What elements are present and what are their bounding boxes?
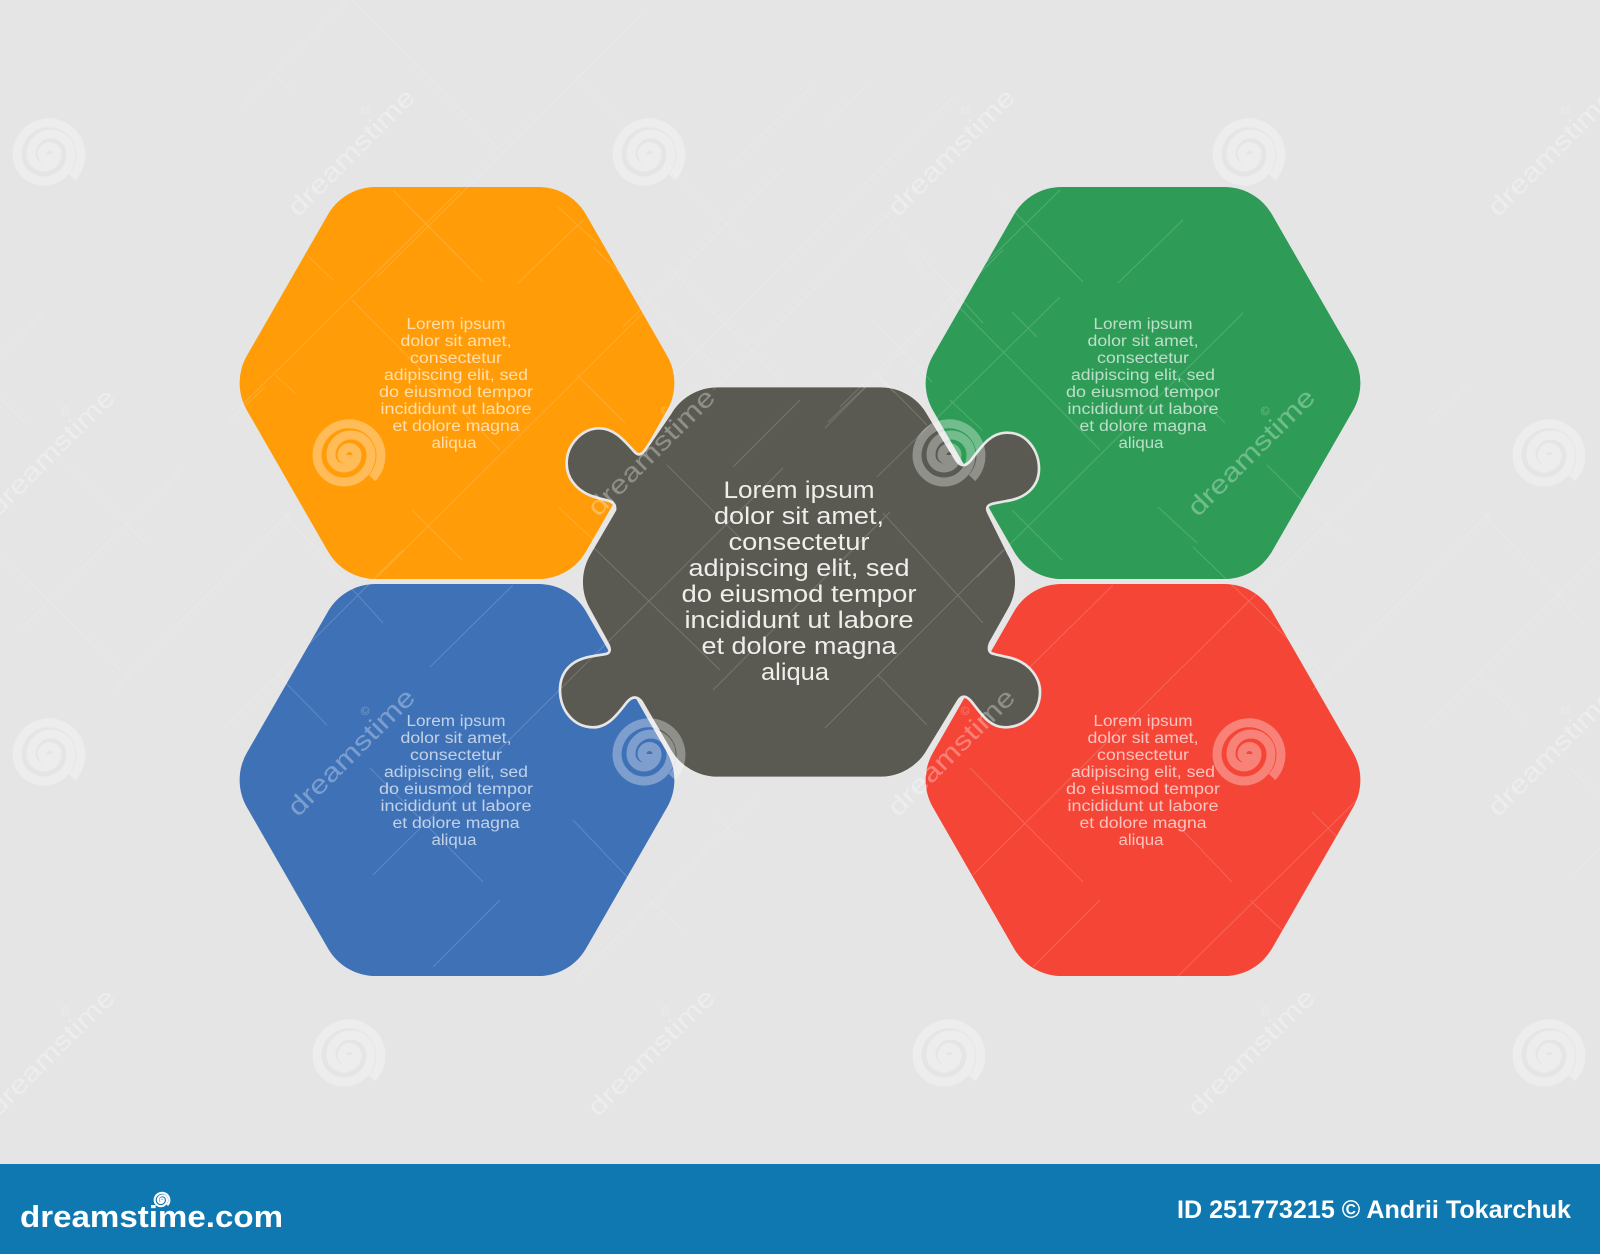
text block: green hexagon: dolor sit amet, (1088, 333, 1198, 350)
text block: green hexagon (1066, 316, 1220, 452)
text block: red hexagon: adipiscing elit, sed (1071, 764, 1215, 781)
text block: orange hexagon: aliqua (432, 435, 477, 452)
text block: red hexagon: dolor sit amet, (1088, 730, 1198, 747)
text block: central hexagon: aliqua (761, 659, 829, 686)
watermark: dreamstime text repeats: dreamstime (881, 82, 1021, 222)
watermark: dreamstime text repeats: © (357, 703, 373, 719)
text block: orange hexagon: do eiusmod tempor (379, 384, 533, 401)
text block: green hexagon: incididunt ut labore (1068, 401, 1218, 418)
watermark: dreamstime text repeats: dreamstime (281, 682, 421, 822)
text block: green hexagon: consectetur (1097, 350, 1189, 367)
watermark: dreamstime text repeats: © (657, 1003, 673, 1019)
watermark: dreamstime text repeats: dreamstime (1181, 982, 1321, 1122)
text block: central hexagon: Lorem ipsum (724, 477, 874, 504)
watermark: dreamstime text repeats: dreamstime (581, 382, 721, 522)
panel: orange hexagon (240, 187, 674, 579)
text block: blue hexagon: et dolore magna (392, 815, 520, 832)
text block: orange hexagon: incididunt ut labore (380, 401, 532, 418)
watermark: dreamstime text repeats: © (357, 103, 373, 119)
text block: red hexagon: et dolore magna (1080, 815, 1207, 832)
text block: central hexagon: do eiusmod tempor (682, 581, 916, 608)
watermark: spiral icons (17, 123, 1581, 1082)
footer logo: dreamstime.com (20, 1199, 283, 1234)
text block: orange hexagon: consectetur (410, 350, 502, 367)
text block: blue hexagon: incididunt ut labore (380, 798, 532, 815)
text block: red hexagon: aliqua (1118, 832, 1164, 849)
text block: central hexagon: dolor sit amet, (714, 503, 884, 530)
text block: blue hexagon: do eiusmod tempor (379, 781, 533, 798)
watermark: dreamstime text repeats: © (1257, 1003, 1273, 1019)
watermark: dreamstime text repeats: © (657, 403, 673, 419)
text block: central hexagon (682, 477, 916, 686)
watermark: dreamstime text repeats: © (1257, 403, 1273, 419)
watermark: dreamstime text repeats: © (1557, 703, 1573, 719)
footer credit: ID 251773215 © Andrii Tokarchuk (1177, 1196, 1571, 1224)
watermark: dreamstime text repeats: © (957, 103, 973, 119)
text block: green hexagon: adipiscing elit, sed (1071, 367, 1215, 384)
text block: green hexagon: Lorem ipsum (1094, 316, 1192, 333)
watermark: dreamstime text repeats: dreamstime (1481, 682, 1600, 822)
watermark: diagonal lines (0, 0, 1600, 977)
text block: red hexagon (1066, 713, 1220, 849)
text block: red hexagon: consectetur (1097, 747, 1189, 764)
panel: green hexagon (926, 187, 1360, 579)
text block: blue hexagon: consectetur (410, 747, 502, 764)
text block: green hexagon: do eiusmod tempor (1066, 384, 1220, 401)
footer banner (0, 1164, 1600, 1254)
text block: central hexagon: consectetur (728, 529, 870, 556)
text block: central hexagon: incididunt ut labore (684, 607, 914, 634)
watermark: dreamstime text repeats: © (57, 403, 73, 419)
text block: green hexagon: aliqua (1118, 435, 1164, 452)
text block: blue hexagon: adipiscing elit, sed (384, 764, 528, 781)
watermark: dreamstime text repeats: dreamstime (581, 982, 721, 1122)
panel: central dark puzzle hexagon (560, 386, 1040, 778)
text block: blue hexagon: Lorem ipsum (406, 713, 506, 730)
watermark: dreamstime text repeats: dreamstime (1481, 82, 1600, 222)
text block: green hexagon: et dolore magna (1080, 418, 1207, 435)
watermark: dreamstime text repeats: dreamstime (281, 82, 421, 222)
text block: orange hexagon (379, 316, 533, 452)
panel: red hexagon (926, 584, 1360, 976)
text block: blue hexagon: aliqua (432, 832, 477, 849)
text block: orange hexagon: et dolore magna (392, 418, 520, 435)
text block: red hexagon: incididunt ut labore (1068, 798, 1218, 815)
text block: central hexagon: adipiscing elit, sed (688, 555, 910, 582)
watermark: dreamstime text repeats: dreamstime (1181, 382, 1321, 522)
watermark: dreamstime text repeats: © (957, 703, 973, 719)
watermark: dreamstime text repeats: © (57, 1003, 73, 1019)
text block: blue hexagon: dolor sit amet, (400, 730, 512, 747)
text block: red hexagon: Lorem ipsum (1094, 713, 1192, 730)
text block: orange hexagon: dolor sit amet, (400, 333, 512, 350)
text block: blue hexagon (379, 713, 533, 849)
text block: red hexagon: do eiusmod tempor (1066, 781, 1220, 798)
watermark: dreamstime text repeats: dreamstime (881, 682, 1021, 822)
panel: blue hexagon (240, 584, 674, 976)
text block: central hexagon: et dolore magna (702, 633, 897, 660)
watermark: dreamstime text repeats: © (1557, 103, 1573, 119)
text block: orange hexagon: adipiscing elit, sed (384, 367, 528, 384)
text block: orange hexagon: Lorem ipsum (406, 316, 506, 333)
